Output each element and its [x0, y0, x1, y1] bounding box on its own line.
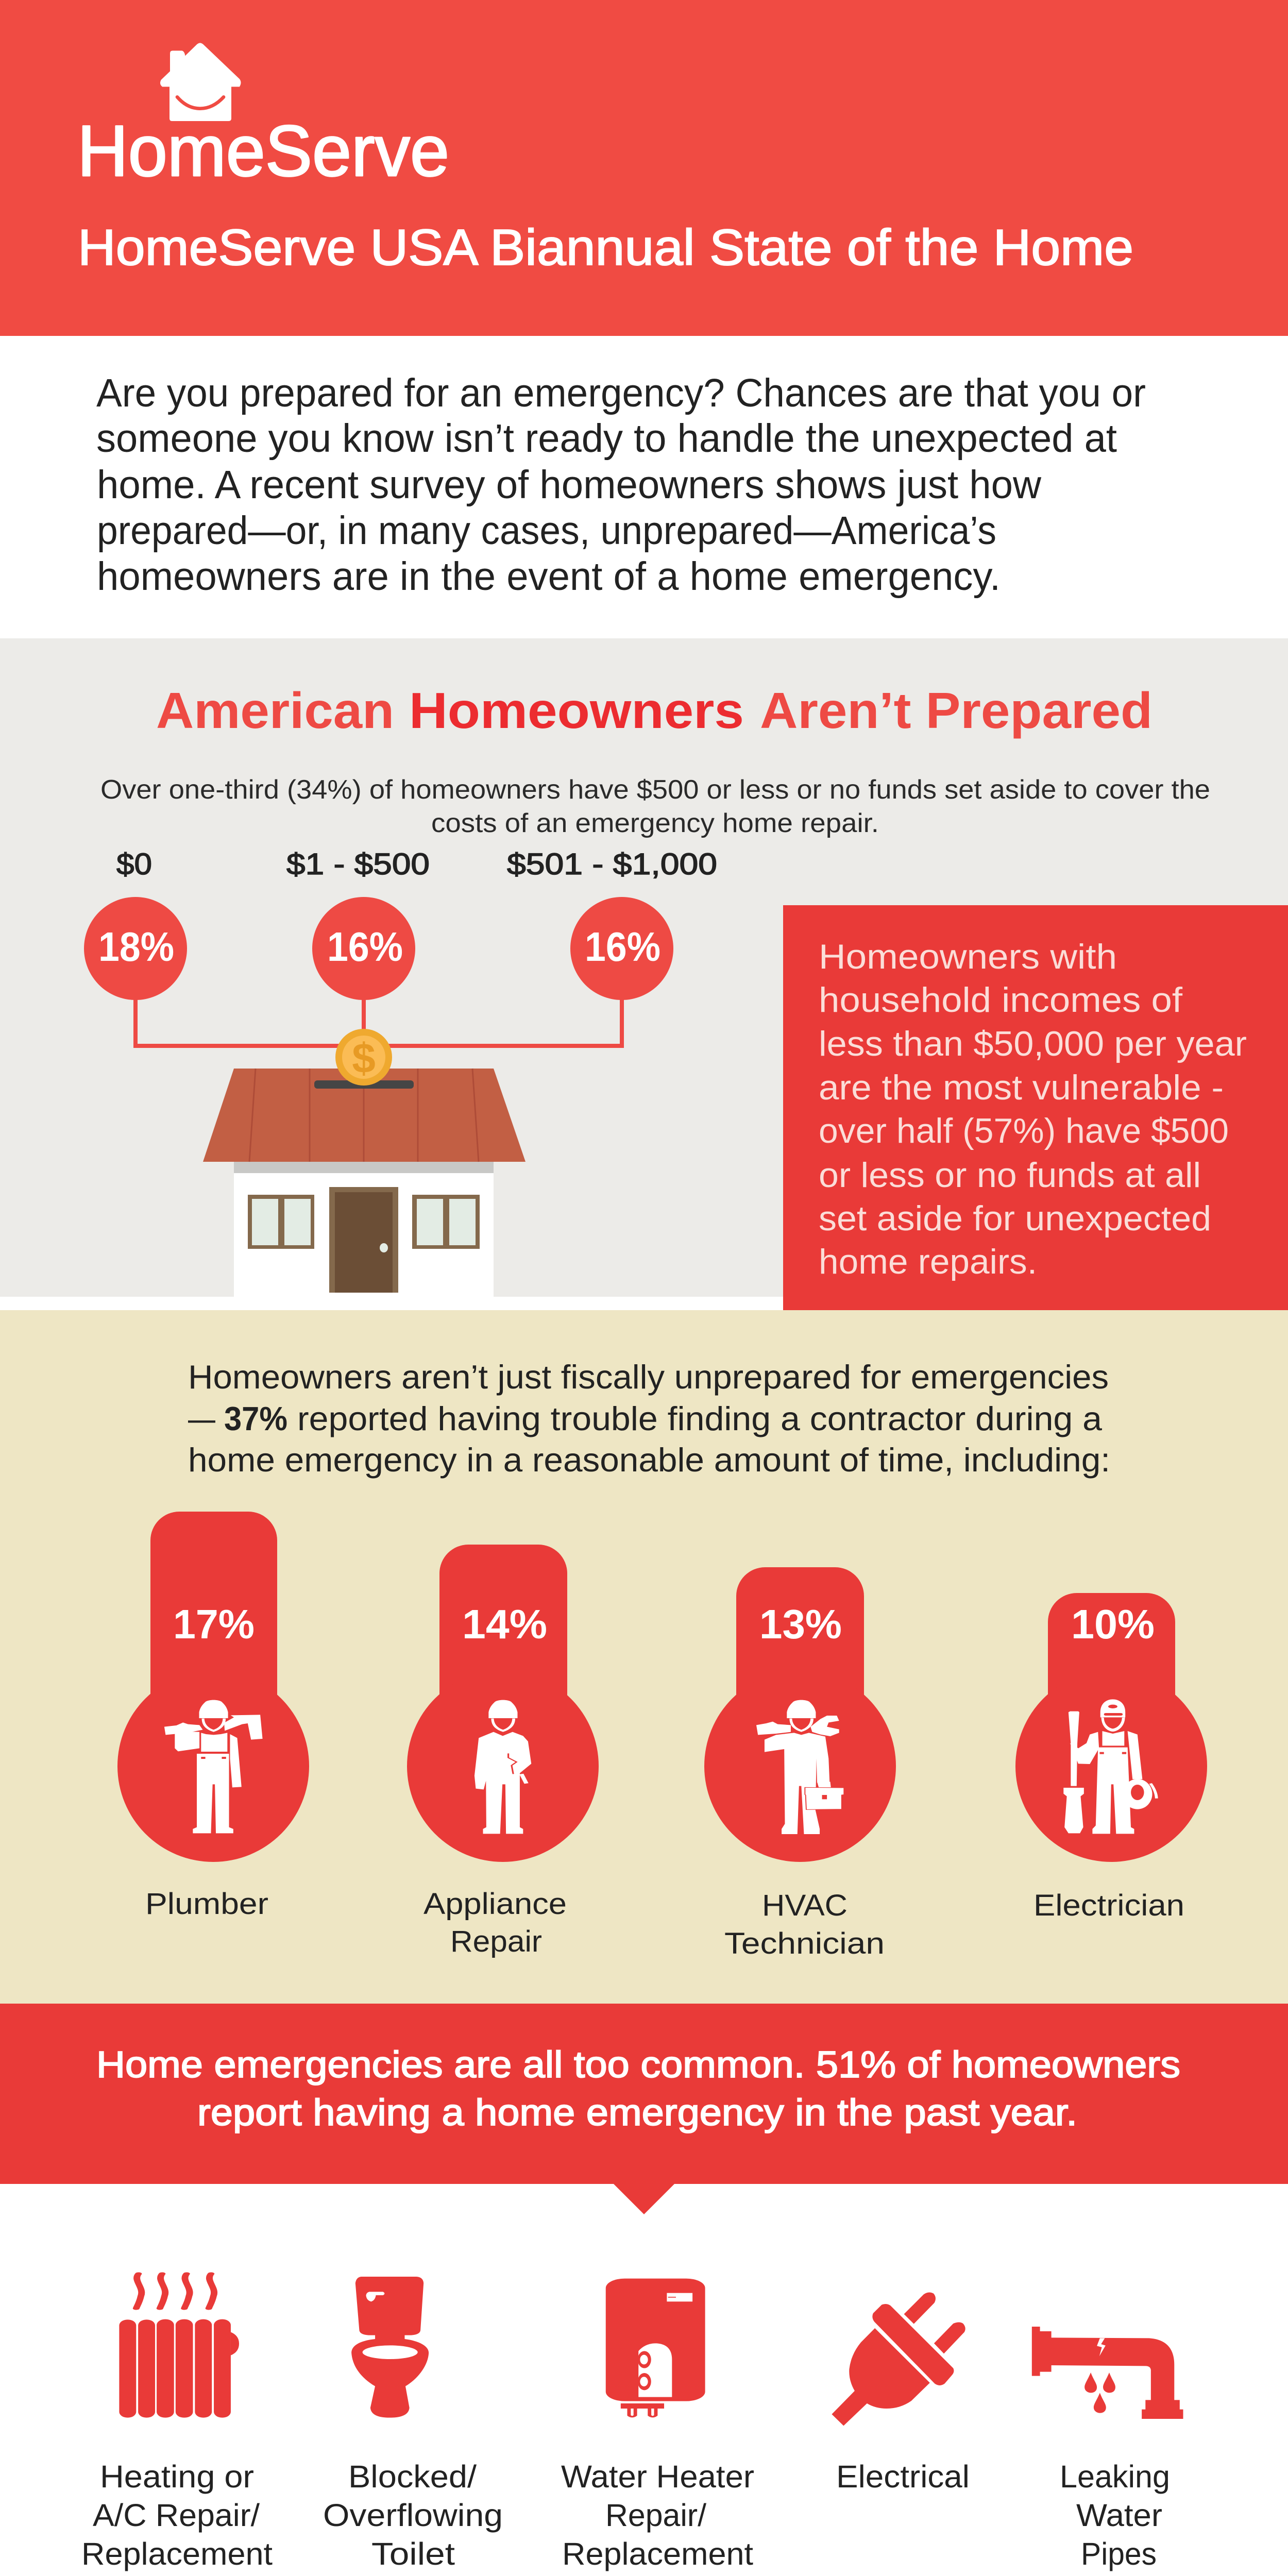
subheading text [100, 775, 1210, 838]
stat circle: 16%: 16% [327, 924, 403, 970]
item: leaking pipes: Pipes [1081, 2536, 1157, 2571]
icon: radiator [119, 2274, 239, 2418]
panel: intro text: home. A recent survey of homeowners shows just how [97, 463, 1041, 507]
contractor intro text: 37% [224, 1400, 287, 1437]
thermometer: electrician 10%: 10% [1071, 1601, 1155, 1647]
icon: toilet [351, 2277, 429, 2418]
item: toilet: Toilet [371, 2536, 455, 2571]
savings bracket labels: $0 [116, 848, 152, 881]
callout: low-income homeowners: household incomes of [819, 980, 1182, 1020]
thermometer: plumber 17% [117, 1512, 309, 1862]
label: HVAC technician: HVAC [762, 1889, 848, 1922]
callout: low-income homeowners [783, 905, 1288, 1310]
icon: HVAC technician [756, 1700, 844, 1834]
contractor intro text: Homeowners aren’t just fiscally unprepared for emergencies [188, 1358, 1109, 1396]
banner: report having a home emergency in the past year. [197, 2092, 1077, 2133]
callout: low-income homeowners: over half (57%) have $500 [819, 1111, 1229, 1150]
panel: contractors [0, 1310, 1288, 2004]
item: water heater [561, 2459, 754, 2576]
icon: appliance repair worker [474, 1700, 531, 1834]
title: HomeServe USA Biannual State of the Home [78, 219, 1133, 276]
logo: HomeServe house and wordmark [77, 43, 449, 191]
icon: electrician [1063, 1699, 1157, 1834]
thermometer: appliance repair 14%: 14% [462, 1601, 547, 1647]
heading: American [156, 682, 394, 739]
label: plumber: Plumber [145, 1887, 268, 1921]
panel: header [0, 0, 1288, 336]
panel: intro text: someone you know isn’t ready to handle the unexpected at [96, 416, 1117, 461]
thermometer: HVAC technician 13% [704, 1567, 896, 1862]
stat circle: 16% [312, 897, 415, 1000]
callout: low-income homeowners: are the most vulnerable - [819, 1068, 1224, 1107]
item: leaking pipes: Water [1076, 2498, 1162, 2533]
icon: plumber [164, 1700, 263, 1833]
callout: low-income homeowners: set aside for unexpected [819, 1199, 1211, 1238]
callout: low-income homeowners: or less or no funds at all [819, 1156, 1201, 1195]
label: electrician: Electrician [1033, 1889, 1184, 1922]
connector lines [135, 997, 622, 1046]
item: electrical: Electrical [836, 2459, 970, 2494]
item: water heater: Replacement [562, 2536, 753, 2571]
heading [156, 682, 1153, 739]
callout: low-income homeowners: home repairs. [819, 1242, 1037, 1281]
icon: water heater [606, 2279, 705, 2417]
panel: intro text [0, 336, 1288, 638]
subheading text: Over one-third (34%) of homeowners have $500 or less or no funds set aside to cover the [100, 775, 1210, 805]
thermometer: plumber 17%: 17% [173, 1601, 255, 1647]
icon: house piggy bank [203, 1029, 526, 1297]
label: appliance repair: Repair [450, 1925, 542, 1958]
label: HVAC technician [724, 1889, 885, 1960]
contractor intro text: home emergency in a reasonable amount of time, including: [188, 1441, 1110, 1479]
item: water heater: Repair/ [605, 2498, 706, 2533]
subheading text: costs of an emergency home repair. [431, 808, 879, 838]
panel: American homeowners aren't prepared [0, 638, 1288, 1310]
contractor intro text: reported having trouble finding a contractor during a [297, 1400, 1103, 1437]
item: toilet: Overflowing [323, 2498, 503, 2533]
icon: coin [335, 1029, 392, 1086]
item: water heater: Water Heater [561, 2459, 754, 2494]
item: heating or A/C: Replacement [81, 2536, 273, 2571]
panel: intro text: Are you prepared for an emergency? Chances are that you or [96, 371, 1146, 415]
label: HVAC technician: Technician [724, 1927, 885, 1960]
item: toilet: Blocked/ [348, 2459, 477, 2494]
stat circle: 16%: 16% [585, 924, 660, 970]
panel: home emergencies [0, 2004, 1288, 2576]
contractor intro text: – [188, 1400, 216, 1437]
item: heating or A/C: Heating or [100, 2459, 254, 2494]
heading: Homeowners [409, 682, 744, 739]
icon: plug [832, 2293, 965, 2426]
panel: intro text: homeowners are in the event of a home emergency. [97, 554, 1001, 599]
item: heating or A/C: A/C Repair/ [93, 2498, 260, 2533]
thermometer: electrician 10% [1015, 1593, 1207, 1862]
icon: coin: $ [352, 1035, 376, 1082]
callout: low-income homeowners: less than $50,000 per year [819, 1024, 1247, 1063]
callout: low-income homeowners: Homeowners with [819, 937, 1117, 976]
logo: HomeServe house and wordmark: HomeServe [77, 110, 449, 191]
stat circle: 16% [570, 897, 673, 1000]
banner [0, 2004, 1288, 2214]
item: leaking pipes: Leaking [1060, 2459, 1170, 2494]
item: toilet [323, 2459, 503, 2576]
savings bracket labels: $501 - $1,000 [507, 848, 717, 881]
stat circle: 18% [84, 897, 187, 1000]
panel: intro text: prepared—or, in many cases, unprepared—America’s [97, 509, 996, 553]
item: leaking pipes [1060, 2459, 1170, 2576]
label: appliance repair: Appliance [423, 1887, 567, 1921]
label: appliance repair [423, 1887, 567, 1958]
thermometer: appliance repair 14% [407, 1545, 599, 1862]
thermometer: HVAC technician 13%: 13% [759, 1601, 842, 1647]
item: heating or A/C [81, 2459, 273, 2576]
banner: Home emergencies are all too common. 51% of homeowners [96, 2044, 1180, 2086]
icon: leaking pipe [1032, 2327, 1183, 2419]
stat circle: 18%: 18% [98, 924, 174, 970]
savings bracket labels [116, 848, 717, 881]
heading: Aren’t Prepared [760, 682, 1153, 739]
contractor intro text [188, 1358, 1110, 1479]
savings bracket labels: $1 - $500 [286, 848, 430, 881]
